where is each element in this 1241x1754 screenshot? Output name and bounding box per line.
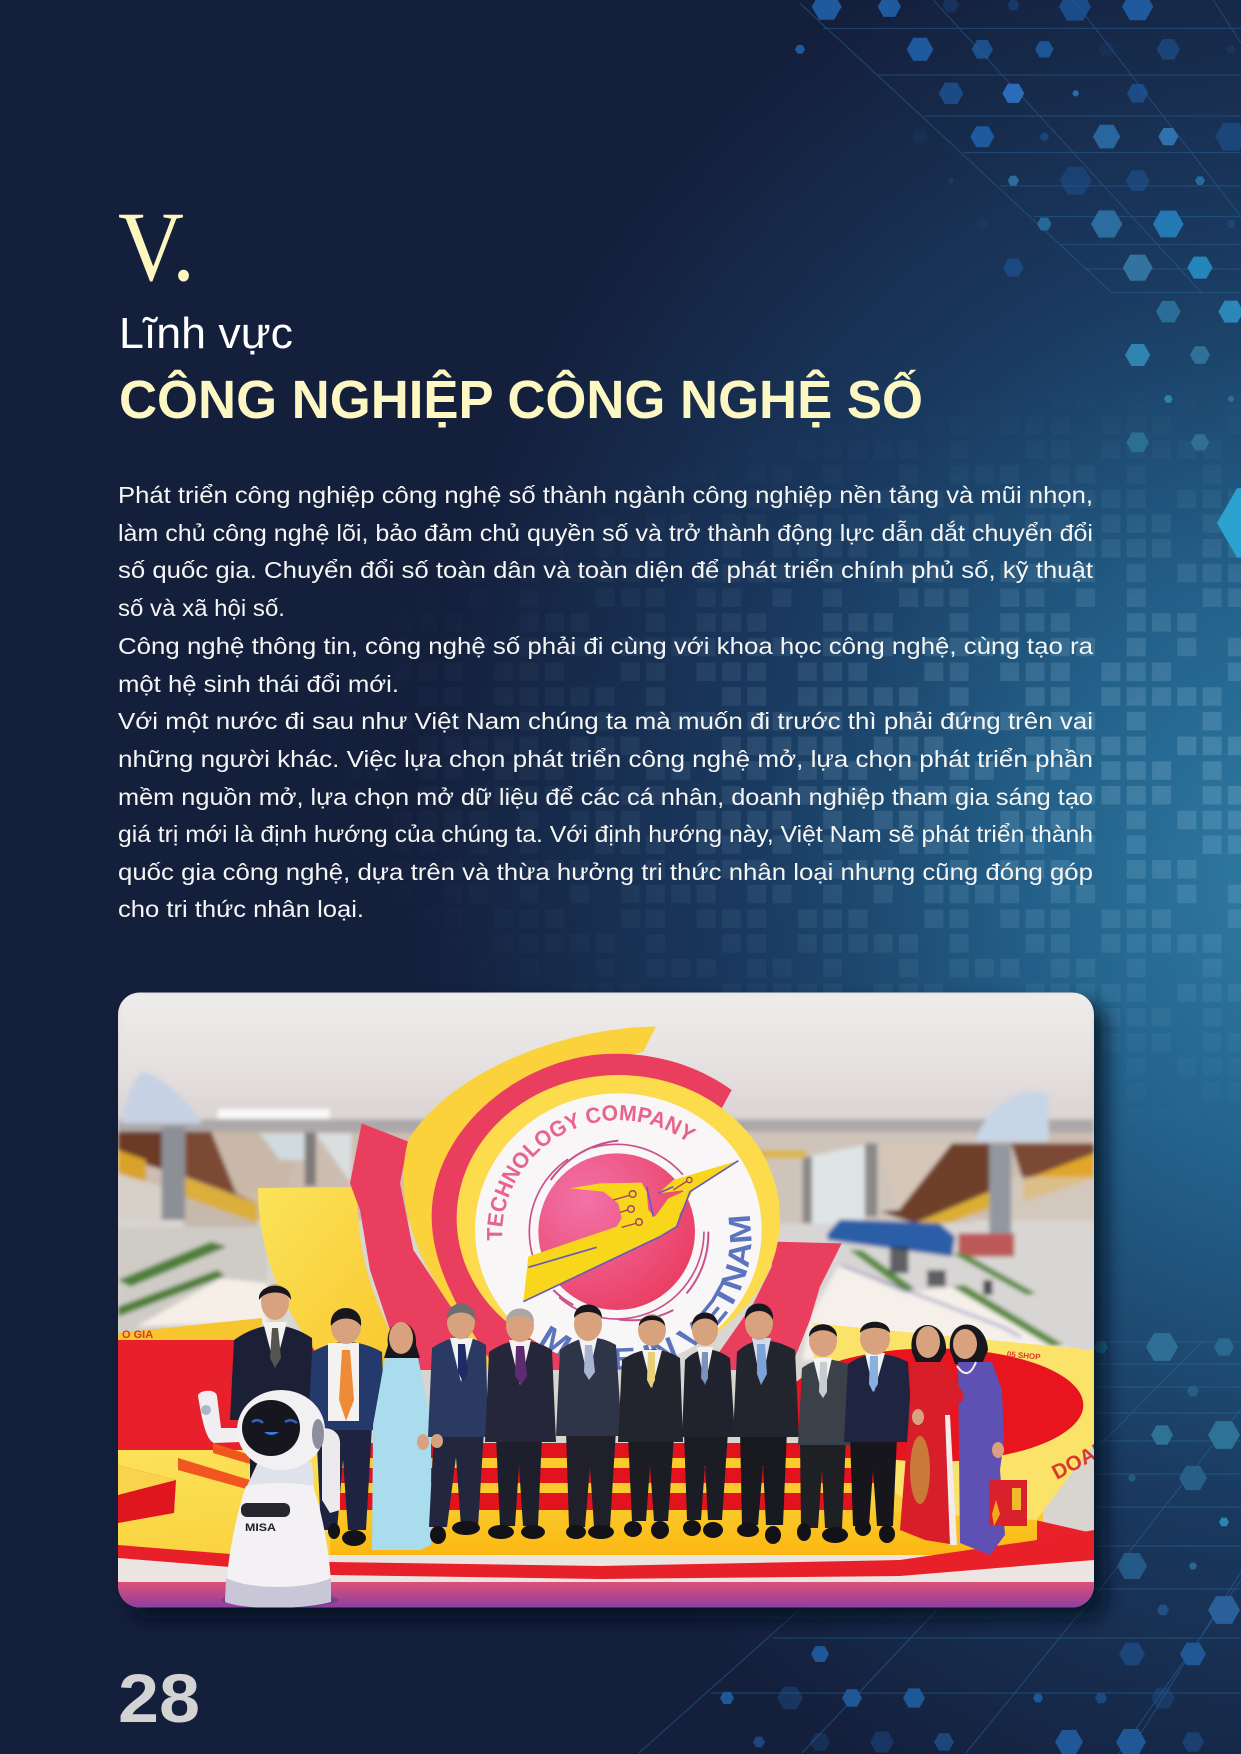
stage: 05 SHOP <box>1006 1350 1042 1362</box>
body text: quốc gia công nghệ, dựa trên và thừa hưởng tri thức nhân loại nhưng cũng đóng góp <box>118 859 1093 885</box>
big logo: TECHNOLOGY COMPANY <box>487 1105 697 1240</box>
section number: V. <box>118 191 195 302</box>
body text: Phát triển công nghiệp công nghệ số thành ngành công nghiệp nền tảng và mũi nhọn, <box>118 482 1093 508</box>
section title: CÔNG NGHIỆP CÔNG NGHỆ SỐ <box>119 369 923 430</box>
red gift bag <box>989 1480 1027 1526</box>
person 7 <box>618 1314 683 1539</box>
body text: số quốc gia. Chuyển đổi số toàn dân và toàn diện để phát triển chính phủ số, kỹ thuật <box>118 557 1094 583</box>
photo shadow <box>130 1004 1106 1619</box>
body text: những người khác. Việc lựa chọn phát triển công nghệ mở, lựa chọn phát triển phần <box>118 746 1093 772</box>
body text: Với một nước đi sau như Việt Nam chúng ta mà muốn đi trước thì phải đứng trên vai <box>118 708 1093 734</box>
photo: group at stage with logo <box>118 992 1094 1608</box>
person 9 <box>733 1304 799 1544</box>
page number: 28 <box>118 1660 200 1737</box>
person 6 <box>556 1304 622 1539</box>
body text: số và xã hội số. <box>118 595 285 621</box>
big logo: MADE IN VIETNAM <box>540 1216 752 1370</box>
body text: cho tri thức nhân loại. <box>118 896 364 922</box>
body text: mềm nguồn mở, lựa chọn mở dữ liệu để các cá nhân, doanh nghiệp tham gia sáng tạo <box>118 784 1093 810</box>
body text: một hệ sinh thái đổi mới. <box>118 671 399 697</box>
person 1 <box>230 1284 314 1485</box>
group of people <box>230 1284 1027 1555</box>
person 11 <box>844 1322 913 1543</box>
body text: giá trị mới là định hướng của chúng ta. Với định hướng này, Việt Nam sẽ phát triển thành <box>118 821 1093 847</box>
body text <box>118 482 1094 922</box>
person 4 <box>428 1304 488 1544</box>
section label: Lĩnh vực <box>119 309 293 358</box>
person 2 <box>308 1308 385 1546</box>
hall background <box>118 992 1094 1367</box>
robot: MISA <box>245 1522 276 1534</box>
big logo <box>258 1026 842 1370</box>
person 8 <box>682 1312 735 1538</box>
background lines and hexagons, bottom right <box>639 1333 1241 1754</box>
background lines and hexagons, top right <box>795 0 1241 452</box>
person 5 <box>485 1308 556 1539</box>
stage: DOANH <box>1048 1429 1126 1484</box>
body text: Công nghệ thông tin, công nghệ số phải đi cùng với khoa học công nghệ, cùng tạo ra <box>118 633 1094 659</box>
large hexagon at right edge <box>1217 488 1241 558</box>
body text: làm chủ công nghệ lõi, bảo đảm chủ quyền số và trở thành động lực dẫn dắt chuyển đổi <box>118 520 1093 546</box>
person 3: woman in light blue dress <box>372 1322 431 1550</box>
person 13: woman in purple dress <box>950 1324 1005 1555</box>
person 12: woman in red dress <box>900 1325 964 1545</box>
background square grid <box>556 492 1241 1020</box>
robot <box>198 1390 340 1608</box>
person 10 <box>797 1324 850 1543</box>
stage: O GIA <box>122 1329 153 1341</box>
stage <box>118 1318 1126 1608</box>
